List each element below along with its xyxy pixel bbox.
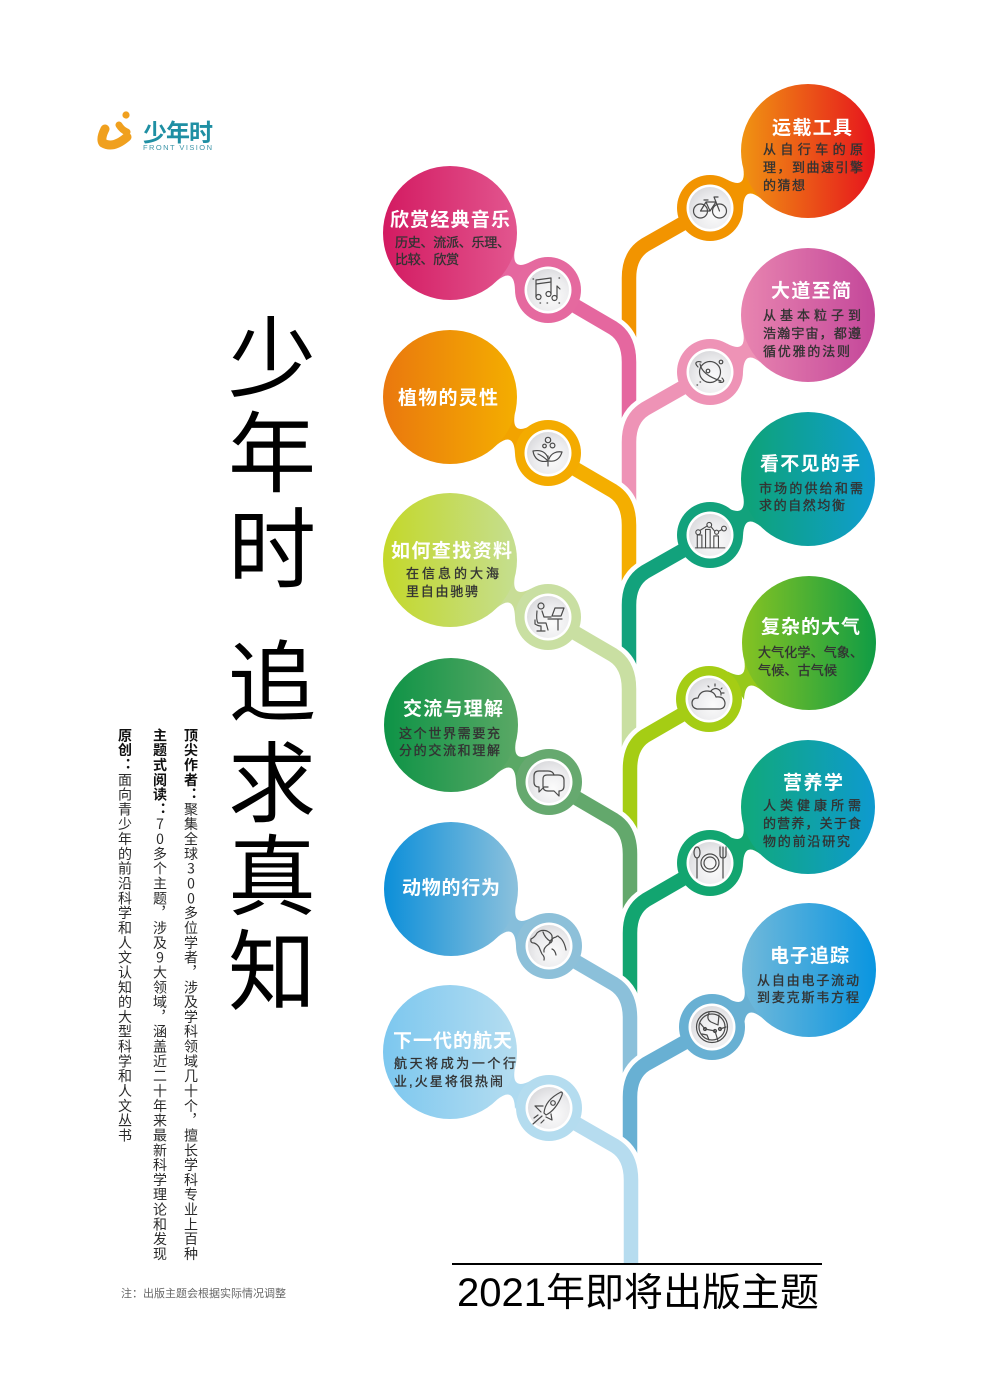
branch: research [548, 617, 629, 752]
branch: communication [549, 782, 630, 917]
bottom rule [452, 1263, 822, 1265]
description: 从自行车的原 [763, 142, 863, 157]
branch: invisible hand [629, 535, 710, 670]
description: 这个世界需要充 [399, 726, 500, 741]
panel: simplicity [677, 248, 875, 405]
panel: nutrition [677, 740, 875, 896]
heading: 复杂的大气 [761, 616, 860, 638]
branch: music [548, 290, 629, 425]
heading: 植物的灵性 [398, 387, 498, 409]
description [758, 645, 863, 678]
description: 求的自然均衡 [759, 498, 845, 513]
heading: 下一代的航天 [393, 1029, 512, 1052]
description: 物的前沿研究 [763, 834, 850, 849]
panel: plant sentience [383, 330, 581, 486]
icon: cloud and sun [692, 684, 725, 709]
icon: rocket [533, 1092, 562, 1124]
description [763, 308, 861, 359]
title: 少年时追求真知 [228, 289, 316, 1029]
branch: spaceflight trunk [549, 1108, 631, 1264]
description: 分的交流和理解 [399, 743, 500, 758]
panel: communication [384, 658, 582, 815]
description: 浩瀚宇宙，都遵 [763, 326, 861, 341]
description [757, 973, 859, 1005]
icon: bar and line chart [695, 522, 726, 548]
branch: simplicity [629, 372, 710, 507]
panel: complex atmosphere [676, 576, 876, 732]
description: 航天将成为一个行 [394, 1056, 516, 1071]
icon: music notes [533, 278, 560, 303]
icon: circuit globe [696, 1012, 728, 1042]
description: 从自由电子流动 [757, 973, 859, 988]
panel: finding information [383, 493, 581, 650]
panel: animal behaviour [384, 822, 582, 979]
heading: 动物的行为 [402, 877, 500, 899]
panel: classical music [383, 166, 581, 323]
branch: animals [549, 946, 630, 1081]
heading: 运载工具 [772, 117, 852, 139]
description [394, 1056, 516, 1089]
text block: original: 原创： 面向青少年的前沿科学和人文认知的大型科学和人文丛书 [115, 728, 135, 1143]
description [763, 142, 863, 193]
text block: thematic reading: 主题式阅读： 70多个主题，涉及9大领域，涵盖近二十年来最新科学理论和发现 [150, 728, 170, 1262]
icon: person at laptop [535, 603, 564, 631]
description: 的营养，关于食 [763, 816, 861, 831]
heading: 如何查找资料 [391, 540, 512, 562]
branch: vehicles [629, 208, 710, 343]
description [763, 798, 861, 849]
panel: invisible hand [677, 412, 875, 568]
description: 循优雅的法则 [763, 344, 850, 359]
tree branches [548, 208, 712, 1264]
description [399, 726, 500, 758]
description: 理，到曲速引擎 [763, 160, 863, 175]
heading: 看不见的手 [760, 453, 860, 475]
description: 气候、古气候 [758, 663, 837, 678]
heading: 交流与理解 [403, 697, 503, 720]
description [759, 481, 863, 513]
icon: planet [696, 360, 724, 385]
heading: 电子追踪 [770, 944, 849, 967]
heading: 大道至简 [771, 279, 851, 302]
text block: top authors: 顶尖作者： 聚集全球300多位学者，涉及学科领域几十个，擅长学科专业上百种 [181, 728, 201, 1262]
panel: vehicles [677, 84, 875, 241]
description [395, 235, 510, 267]
branch: nutrition [630, 863, 710, 998]
icon: plant [533, 437, 562, 466]
description: 从基本粒子到 [763, 308, 861, 323]
heading: 欣赏经典音乐 [390, 208, 510, 231]
description [406, 566, 499, 599]
icon: dog and cat [531, 930, 566, 960]
panel: electron tracking [679, 903, 876, 1060]
branch: atmosphere [630, 699, 709, 834]
footnote: 注：出版主题会根据实际情况调整 [121, 1286, 286, 1300]
icon: bicycle [694, 197, 726, 218]
description: 的猜想 [763, 178, 805, 193]
icon: plate and cutlery [694, 847, 726, 878]
icon: logo mark [102, 111, 130, 145]
icon: chat bubbles [534, 771, 564, 796]
branch: electrons [630, 1027, 712, 1162]
logo [102, 111, 213, 152]
description: 人类健康所需 [763, 798, 861, 813]
description: 在信息的大海 [406, 566, 499, 581]
description: 里自由驰骋 [406, 584, 478, 599]
description: 历史、流派、乐理、 [395, 235, 510, 250]
panel: next-gen spaceflight [383, 985, 582, 1141]
description: 到麦克斯韦方程 [757, 990, 859, 1005]
description: 大气化学、气象、 [758, 645, 863, 660]
description: 比较、欣赏 [395, 252, 459, 267]
logo subtitle: FRONT VISION [143, 143, 212, 152]
description: 市场的供给和需 [759, 481, 863, 496]
bottom heading: 2021年即将出版主题 [457, 1262, 819, 1318]
heading: 营养学 [783, 771, 843, 794]
description: 业,火星将很热闹 [394, 1074, 503, 1089]
logo wordmark: 少年时 [143, 120, 213, 147]
branch: plants [548, 453, 629, 588]
